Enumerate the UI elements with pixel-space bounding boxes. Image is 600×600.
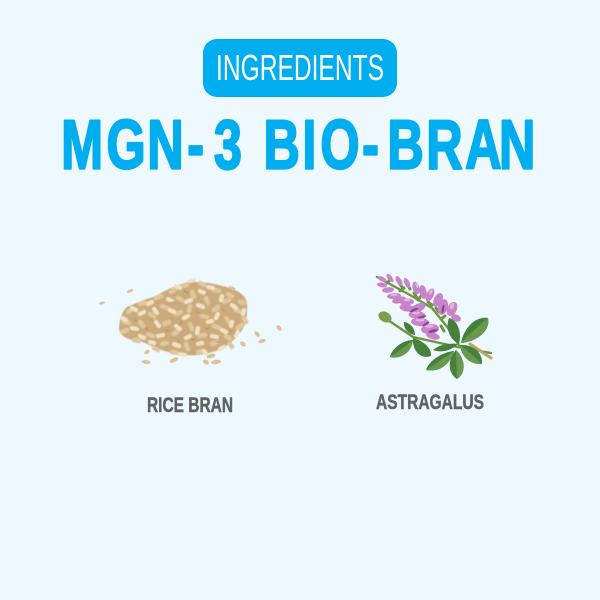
icon: astragalus plant — [376, 273, 491, 379]
label: astragalus: ASTRAGALUS — [376, 391, 484, 414]
title: MGN-3 BIO-BRAN — [61, 105, 535, 183]
label: rice bran: RICE BRAN — [147, 394, 233, 417]
icon: rice bran pile — [99, 280, 283, 366]
calyx — [387, 280, 445, 331]
bud — [376, 309, 394, 325]
badge: ingredients — [203, 39, 397, 97]
badge: ingredients: INGREDIENTS — [216, 47, 384, 88]
